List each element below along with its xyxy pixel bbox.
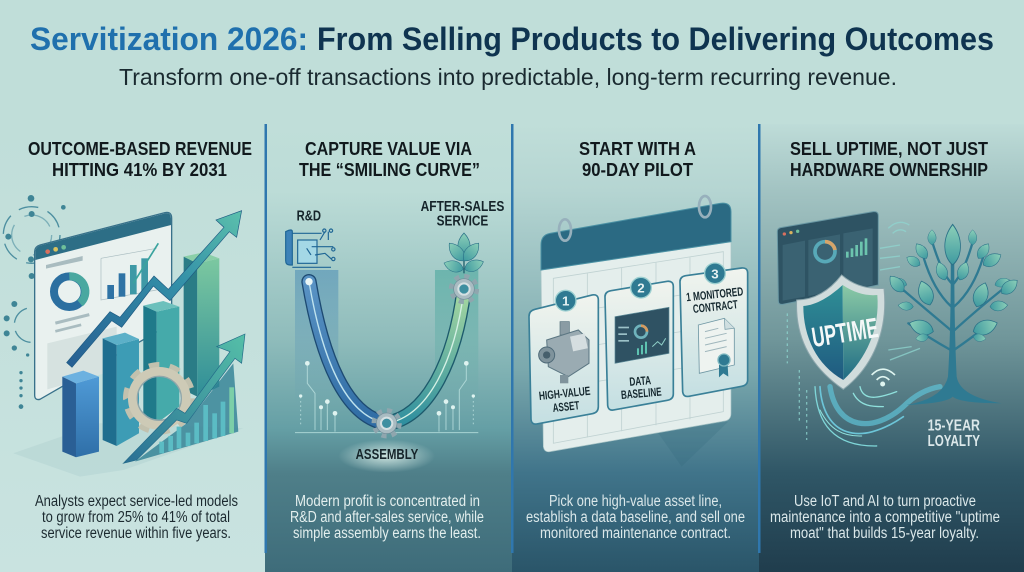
heading: 90-day pilot bbox=[579, 138, 696, 180]
heading: smiling curve: CAPTURE VALUE VIA bbox=[305, 138, 472, 159]
heading: sell uptime bbox=[790, 138, 989, 180]
icon: tree bbox=[886, 224, 1021, 405]
text: smiling curve body bbox=[290, 493, 484, 542]
chart illustration: growth bars and arrows bbox=[3, 195, 245, 477]
label: after-sales service: SERVICE bbox=[437, 214, 488, 230]
icon: shield: UPTIME bbox=[810, 312, 880, 353]
icon: bar 1 bbox=[62, 371, 99, 457]
text: uptime body bbox=[770, 493, 1000, 542]
heading: outcome-based revenue: OUTCOME-BASED REVENUE bbox=[28, 138, 252, 159]
icon: bar 2 bbox=[103, 333, 139, 446]
text: outcome body: to grow from 25% to 41% of total bbox=[42, 509, 230, 526]
heading: sell uptime: HARDWARE OWNERSHIP bbox=[790, 159, 988, 180]
card 1: high-value asset: HIGH-VALUE bbox=[538, 384, 591, 403]
icon: gear after-sales bbox=[451, 276, 477, 302]
icon: binder rings bbox=[559, 196, 711, 241]
card 3: monitored contract: 1 MONITORED bbox=[685, 284, 744, 304]
title bbox=[30, 21, 994, 57]
heading: smiling curve bbox=[299, 138, 480, 180]
icon: small up arrow bbox=[123, 334, 245, 463]
text: outcome body bbox=[35, 493, 238, 542]
card 3: monitored contract: CONTRACT bbox=[692, 297, 739, 316]
icon: gear bbox=[127, 366, 191, 430]
icon: curve left bbox=[305, 278, 387, 423]
icon: sprout bbox=[442, 233, 485, 274]
icon: curve right bbox=[387, 290, 464, 423]
icon: bar 4 bbox=[184, 252, 219, 397]
icon: calendar bbox=[541, 196, 731, 452]
icon: shield bbox=[797, 275, 885, 389]
icon: wifi bbox=[872, 369, 895, 386]
heading: 90-day pilot: START WITH A bbox=[579, 138, 696, 159]
icon: bar 3 bbox=[143, 301, 179, 423]
text: outcome body: Analysts expect service-led models bbox=[35, 493, 238, 510]
card 3: monitored contract: 3 bbox=[711, 266, 719, 281]
icon: data dashboard bbox=[615, 307, 669, 363]
heading: 90-day pilot: 90-DAY PILOT bbox=[582, 159, 694, 180]
icon: large up arrow bbox=[67, 211, 242, 367]
card 2: data baseline bbox=[605, 277, 673, 410]
label: after-sales service bbox=[421, 199, 504, 230]
label: after-sales service: AFTER-SALES bbox=[421, 199, 504, 215]
text: uptime body: Use IoT and AI to turn proactive bbox=[794, 493, 976, 510]
icon: assembly glow bbox=[338, 439, 435, 473]
label: assembly: ASSEMBLY bbox=[356, 447, 418, 463]
text: smiling curve body: simple assembly earns the least. bbox=[293, 525, 481, 542]
icon: blueprint bbox=[286, 229, 335, 267]
text: pilot body: Pick one high-value asset line, bbox=[549, 493, 722, 510]
card 2: data baseline: DATA bbox=[629, 373, 652, 389]
icon: dark dashboard bbox=[777, 212, 878, 304]
text: smiling curve body: R&D and after-sales service, while bbox=[290, 509, 484, 526]
title: Servitization 2026: bbox=[30, 21, 308, 57]
icon: mini bars wedge bbox=[135, 363, 238, 462]
icon: data streams bbox=[815, 387, 940, 446]
panel: outcome-based revenue bbox=[0, 124, 265, 572]
text: outcome body: service revenue within five years. bbox=[41, 525, 231, 542]
illustration: pilot calendar bbox=[529, 196, 748, 467]
text: pilot body: establish a data baseline, and sell one bbox=[526, 509, 745, 526]
heading: sell uptime: SELL UPTIME, NOT JUST bbox=[790, 138, 989, 159]
label: 15-year loyalty: LOYALTY bbox=[928, 433, 980, 450]
text: pilot body bbox=[526, 493, 745, 542]
label: 15-year loyalty: 15-YEAR bbox=[928, 418, 980, 435]
text: smiling curve body: Modern profit is concentrated in bbox=[295, 493, 480, 510]
heading: smiling curve: THE “SMILING CURVE” bbox=[299, 159, 480, 180]
illustration: uptime shield and tree bbox=[777, 212, 1021, 450]
icon: decorative network circles bbox=[3, 195, 66, 409]
card 1: high-value asset: ASSET bbox=[552, 398, 580, 415]
panel: smiling curve bbox=[265, 124, 512, 572]
subtitle: Transform one-off transactions into predictable, long-term recurring revenue. bbox=[119, 64, 897, 90]
text: pilot body: monitored maintenance contract. bbox=[540, 525, 731, 542]
icon: ground shadow bbox=[13, 423, 243, 477]
panel: 90-day pilot bbox=[512, 124, 759, 572]
icon: contract document bbox=[698, 318, 734, 377]
icon: donut chart bbox=[54, 276, 85, 307]
column dividers bbox=[264, 124, 760, 553]
icon: gear assembly bbox=[374, 411, 399, 436]
icon: wifi signals and data lines bbox=[787, 222, 920, 440]
heading: outcome-based revenue bbox=[28, 138, 252, 180]
label: 15-year loyalty bbox=[928, 418, 980, 450]
chart: smiling curve diagram bbox=[286, 199, 504, 473]
icon: dashboard window bbox=[35, 212, 172, 400]
icon: circuit traces bbox=[295, 363, 478, 433]
label: R&D: R&D bbox=[297, 209, 321, 225]
text: uptime body: moat" that builds 15-year loyalty. bbox=[790, 525, 979, 542]
icon: machine part bbox=[539, 322, 589, 383]
card 1: high-value asset: 1 bbox=[562, 294, 570, 309]
card 2: data baseline: 2 bbox=[637, 281, 645, 296]
card 2: data baseline: BASELINE bbox=[620, 385, 662, 402]
title: From Selling Products to Delivering Outcomes bbox=[317, 21, 994, 57]
heading: outcome-based revenue: HITTING 41% BY 2031 bbox=[52, 159, 227, 180]
card 3: monitored contract bbox=[680, 263, 748, 396]
card 1: high-value asset bbox=[529, 290, 598, 424]
panel: sell uptime bbox=[759, 124, 1024, 572]
